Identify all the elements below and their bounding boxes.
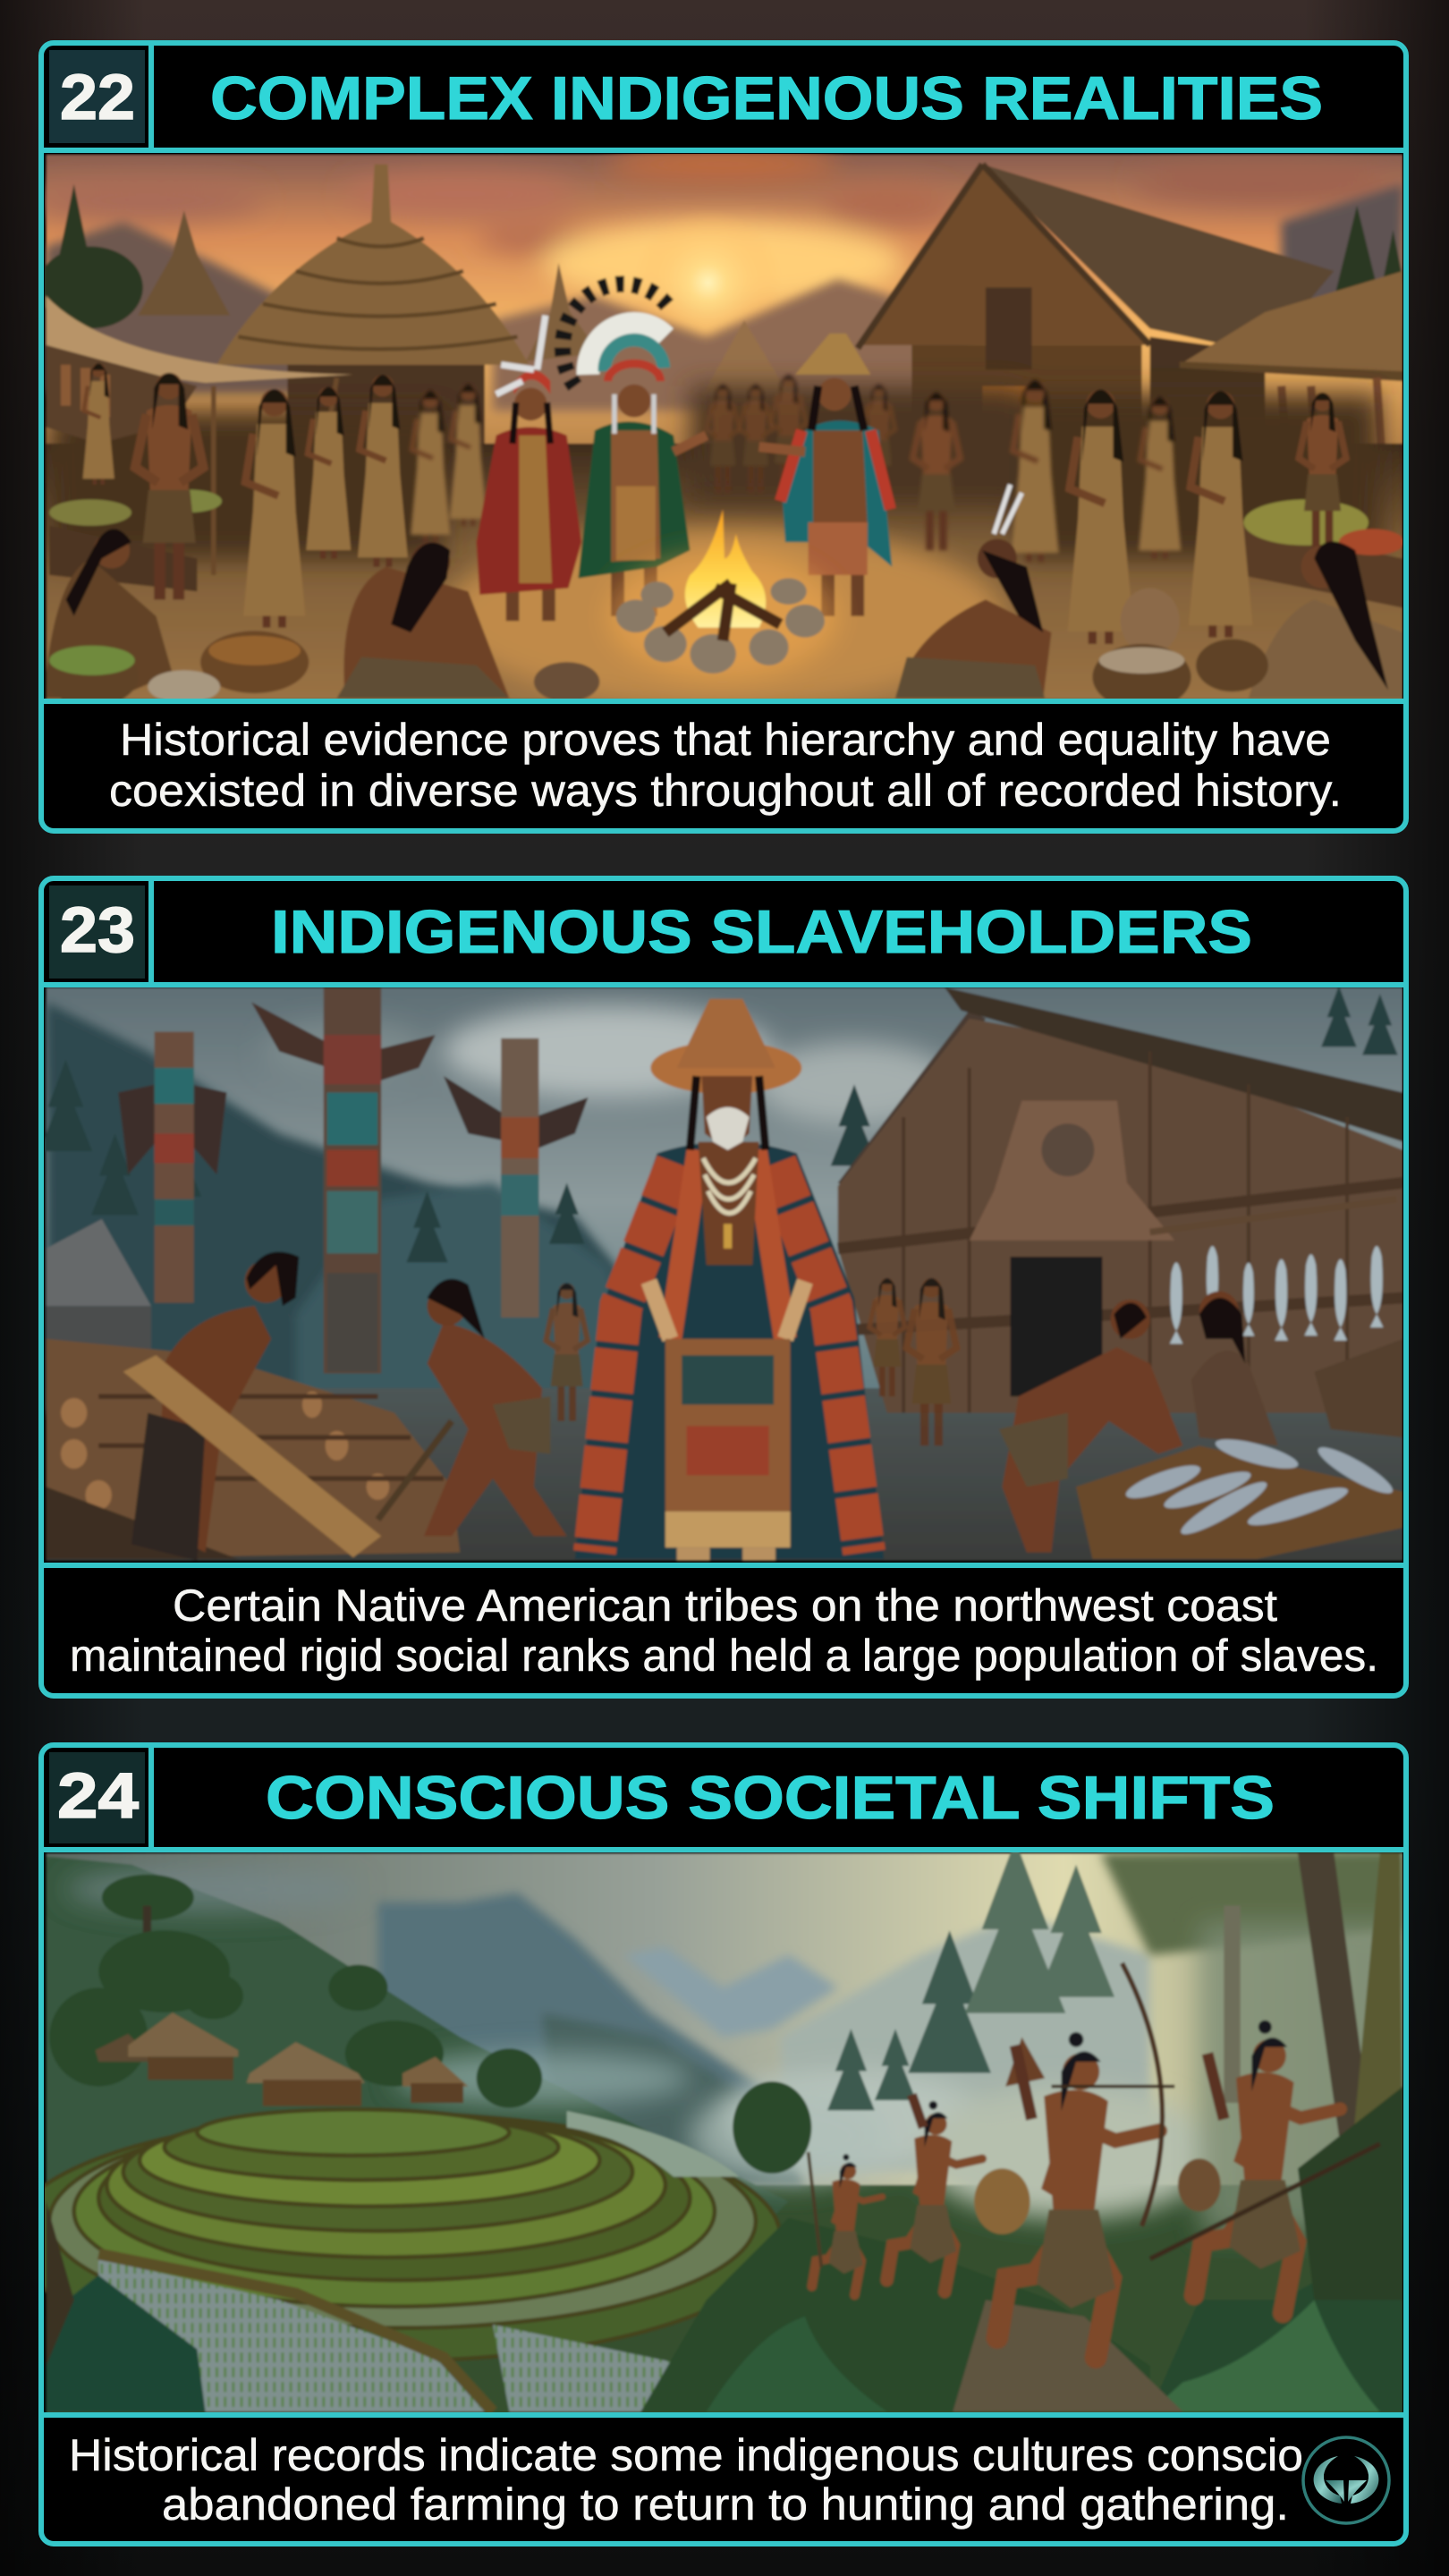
illustration: northwest coast village [39, 986, 1403, 1561]
caption 22: Historical evidence proves that hierarchy and equality have [120, 715, 1331, 765]
flooded rice paddy [98, 2254, 723, 2411]
big round thatched hut [216, 165, 529, 455]
forested hills [39, 986, 1398, 1413]
fish worker right [999, 1292, 1278, 1553]
ground [46, 1388, 1403, 1561]
fish table [1076, 1433, 1403, 1559]
right forest trunks [1101, 1853, 1403, 2234]
caption 23: Certain Native American tribes on the northwest coast [173, 1580, 1277, 1631]
market stalls [49, 489, 1404, 608]
huts [96, 2012, 468, 2106]
foreground foliage [46, 2087, 1403, 2411]
panel: 22 complex indigenous realities [33, 43, 1410, 831]
header bar 23 [45, 882, 1402, 982]
illustration: village sunset gathering [33, 148, 1410, 709]
background workers [547, 1278, 957, 1445]
caption 22 [45, 703, 1402, 828]
number box 24 [45, 1749, 149, 1847]
frame 24 [41, 1745, 1406, 2544]
caption 24: Historical records indicate some indigenous cultures conscio [69, 2430, 1303, 2480]
hill trees [49, 1875, 811, 2174]
number box 22 [45, 47, 149, 148]
number box 23 [45, 882, 149, 982]
frame 22 [41, 43, 1406, 831]
chief in ceremonial robe [575, 999, 884, 1561]
totem poles [118, 987, 589, 1373]
worker with axe [377, 1279, 567, 1536]
terrace fields [8, 2109, 780, 2360]
seated figures foreground [46, 485, 1403, 699]
caption 24: abandoned farming to return to hunting and gathering. [162, 2479, 1289, 2529]
number box 23: 23 [60, 895, 135, 966]
valley mist [723, 2070, 1216, 2218]
caption 22: coexisted in diverse ways throughout all of recorded history. [109, 766, 1342, 816]
number box 24: 24 [57, 1761, 140, 1832]
header bar 22 [45, 47, 1402, 148]
hunter 4 [1150, 2021, 1380, 2313]
hunter 1 [809, 2152, 882, 2295]
longhouse right [855, 161, 1334, 426]
number box 22: 22 [60, 63, 135, 133]
left forested hill [46, 1856, 789, 2300]
frame 23 [41, 878, 1406, 1696]
ground [46, 444, 1403, 699]
header bar 24 [45, 1749, 1402, 1847]
chief right teal cape with hat [759, 334, 892, 616]
title 23: INDIGENOUS SLAVEHOLDERS [271, 898, 1252, 966]
small hut left [46, 1219, 151, 1363]
hunter 2 [887, 2095, 982, 2292]
chief left red cape [477, 316, 581, 621]
market people [83, 363, 1346, 644]
thatched stall right [1180, 271, 1403, 455]
trees left [38, 184, 1410, 328]
panel: 24 conscious societal shifts [8, 1745, 1406, 2544]
log pile [46, 1339, 460, 1559]
caption 24 [45, 2418, 1402, 2541]
distant mountains [377, 1893, 1150, 2185]
conifers [827, 1930, 991, 2110]
hanging fish [1170, 1246, 1384, 1343]
caption 23: maintained rigid social ranks and held a large population of slaves. [70, 1631, 1378, 1681]
canopy left [46, 296, 353, 575]
huts background [139, 211, 775, 377]
crowd background [411, 375, 1181, 562]
illustration: terraces and hunters [8, 1840, 1403, 2415]
firewood at far right [1314, 1339, 1403, 1437]
campfire [608, 509, 838, 679]
title 24: CONSCIOUS SOCIETAL SHIFTS [266, 1764, 1275, 1832]
crowd shadow band [49, 386, 1380, 558]
worker with plank [123, 1252, 381, 1561]
caption 23 [45, 1568, 1402, 1693]
hunter 3 archer [974, 1963, 1174, 2358]
panel: 23 indigenous slaveholders [39, 878, 1406, 1696]
baskets and pots [46, 589, 1268, 709]
chief center green cape with war bonnet [563, 284, 707, 616]
title 22: COMPLEX INDIGENOUS REALITIES [210, 64, 1323, 132]
longhouse [838, 987, 1403, 1413]
logo badge [1303, 2437, 1389, 2523]
